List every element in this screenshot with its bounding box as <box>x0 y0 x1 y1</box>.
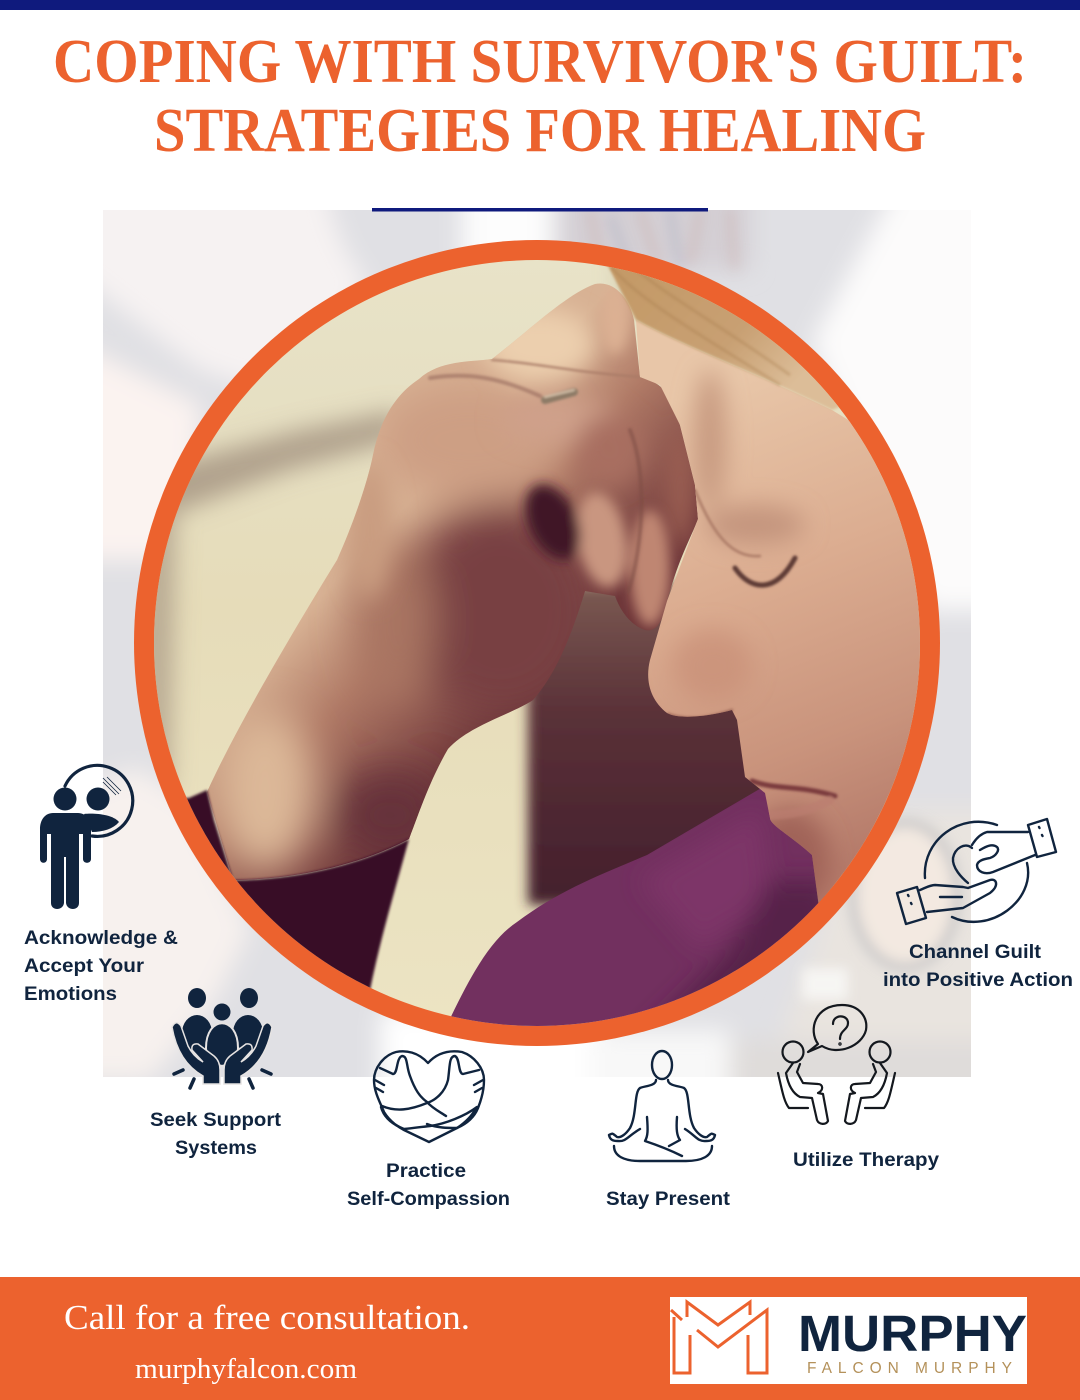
item: self-compassion: Self-Compassion <box>347 1188 510 1210</box>
faded background photo panel <box>103 210 971 1077</box>
item: self-compassion: Practice <box>386 1160 466 1182</box>
navy divider under title <box>372 208 708 212</box>
icon: two seated people talking <box>778 1005 895 1124</box>
icon: hands passing heart <box>897 819 1056 924</box>
item: stay present: Stay Present <box>606 1188 731 1210</box>
item: channel guilt: into Positive Action <box>883 969 1073 991</box>
icon: heart hug <box>374 1051 484 1142</box>
background shading <box>140 255 700 790</box>
item: acknowledge and accept: Acknowledge & <box>24 927 178 949</box>
sleeve <box>186 788 410 988</box>
item: acknowledge and accept: Accept Your <box>24 955 144 977</box>
item: channel guilt <box>883 819 1073 991</box>
item: acknowledge and accept: Emotions <box>24 983 117 1005</box>
website: murphyfalcon.com <box>135 1354 357 1385</box>
logo: MURPHY <box>798 1305 1027 1362</box>
call to action: Call for a free consultation. <box>64 1298 470 1337</box>
hair <box>606 266 839 410</box>
hand and arm <box>207 284 698 880</box>
item: acknowledge and accept <box>24 765 178 1005</box>
item: seek support: Systems <box>175 1137 257 1159</box>
logo <box>670 1297 1027 1384</box>
dark background <box>528 585 828 905</box>
item: seek support <box>150 988 282 1159</box>
photo circle with orange ring <box>134 240 940 1050</box>
title: COPING WITH SURVIVOR'S GUILT: <box>53 28 1027 96</box>
item: self-compassion <box>347 1051 510 1210</box>
title: STRATEGIES FOR HEALING <box>154 97 926 165</box>
icon: meditating figure <box>609 1051 715 1161</box>
title <box>53 28 1027 165</box>
icon: person and mirror <box>40 765 133 909</box>
item: seek support: Seek Support <box>150 1109 282 1131</box>
item: utilize therapy <box>778 1005 939 1171</box>
item: utilize therapy: Utilize Therapy <box>793 1149 939 1171</box>
item: channel guilt: Channel Guilt <box>909 941 1042 963</box>
top navy bar <box>0 0 1080 10</box>
item: stay present <box>606 1051 731 1210</box>
footer band <box>0 1277 1080 1400</box>
logo: FALCON MURPHY <box>807 1360 1012 1377</box>
icon: hands holding people <box>172 988 272 1088</box>
face <box>636 320 920 903</box>
shirt <box>451 789 818 1026</box>
